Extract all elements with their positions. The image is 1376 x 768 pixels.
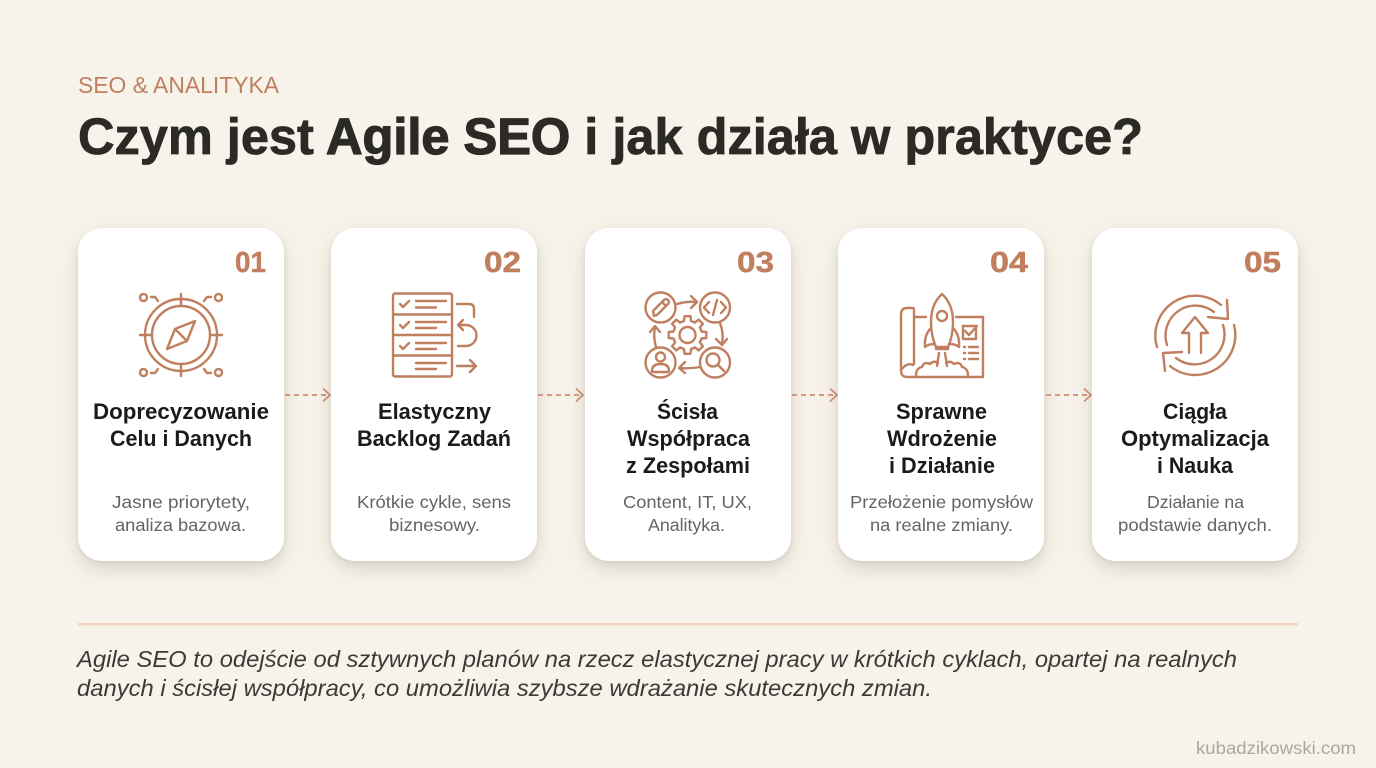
step description	[850, 492, 1033, 535]
summary paragraph: Agile SEO to odejście od sztywnych planów na rzecz elastycznej pracy w krótkich cyklach, opartej na realnych	[75, 646, 1237, 672]
step title: Sprawne	[896, 399, 987, 424]
step title	[357, 399, 511, 451]
summary paragraph	[75, 646, 1237, 701]
step number 02: 02	[484, 247, 521, 279]
step title: Backlog Zadań	[357, 426, 511, 451]
step description: Przełożenie pomysłów	[850, 492, 1033, 512]
website credit: kubadzikowski.com	[1196, 738, 1356, 758]
summary paragraph: danych i ścisłej współpracy, co umożliwia szybsze wdrażanie skutecznych zmian.	[77, 675, 932, 701]
step number 05: 05	[1244, 247, 1281, 279]
icon: backlog list	[393, 294, 477, 376]
step title	[626, 399, 751, 478]
arrow: step 2 to 3	[538, 388, 583, 402]
title: Czym jest Agile SEO i jak działa w praktyce?	[78, 108, 1143, 165]
arrow: step 3 to 4	[792, 388, 837, 402]
step number 01: 01	[235, 247, 266, 279]
step title: z Zespołami	[626, 453, 750, 478]
eyebrow label: SEO & ANALITYKA	[78, 72, 280, 98]
step description	[357, 492, 511, 535]
panel: step 5	[1092, 228, 1298, 561]
step description: podstawie danych.	[1118, 515, 1272, 535]
step title: i Nauka	[1157, 453, 1234, 478]
step description	[1118, 492, 1272, 535]
step description: na realne zmiany.	[870, 515, 1013, 535]
step title: Optymalizacja	[1121, 426, 1270, 451]
icon: team collaboration	[646, 292, 730, 378]
icon: rocket launch over plan	[901, 294, 983, 377]
step description	[623, 492, 752, 535]
step description: analiza bazowa.	[115, 515, 246, 535]
panel: step 3	[585, 228, 791, 561]
step title: Ciągła	[1163, 399, 1228, 424]
step title: Elastyczny	[378, 399, 492, 424]
panel: step 1	[78, 228, 284, 561]
step title: Doprecyzowanie	[93, 399, 269, 424]
step title: i Działanie	[889, 453, 995, 478]
step title: Współpraca	[627, 426, 751, 451]
step number 03: 03	[737, 247, 774, 279]
arrow: step 1 to 2	[285, 388, 330, 402]
step description	[112, 492, 250, 535]
panel: step 4	[838, 228, 1044, 561]
step description: Krótkie cykle, sens	[357, 492, 511, 512]
step description: Jasne priorytety,	[112, 492, 250, 512]
step title	[887, 399, 997, 478]
panel: step 2	[331, 228, 537, 561]
step title	[1121, 399, 1270, 478]
step description: biznesowy.	[389, 515, 480, 535]
step title	[93, 399, 269, 451]
step number 04: 04	[990, 247, 1028, 279]
step title: Celu i Danych	[110, 426, 252, 451]
step description: Działanie na	[1147, 492, 1244, 512]
icon: cycle with up arrow	[1155, 296, 1235, 375]
icon: compass	[140, 294, 222, 376]
step description: Content, IT, UX,	[623, 492, 752, 512]
step title: Ścisła	[657, 399, 719, 424]
step title: Wdrożenie	[887, 426, 997, 451]
step description: Analityka.	[648, 515, 725, 535]
arrow: step 4 to 5	[1046, 388, 1091, 402]
